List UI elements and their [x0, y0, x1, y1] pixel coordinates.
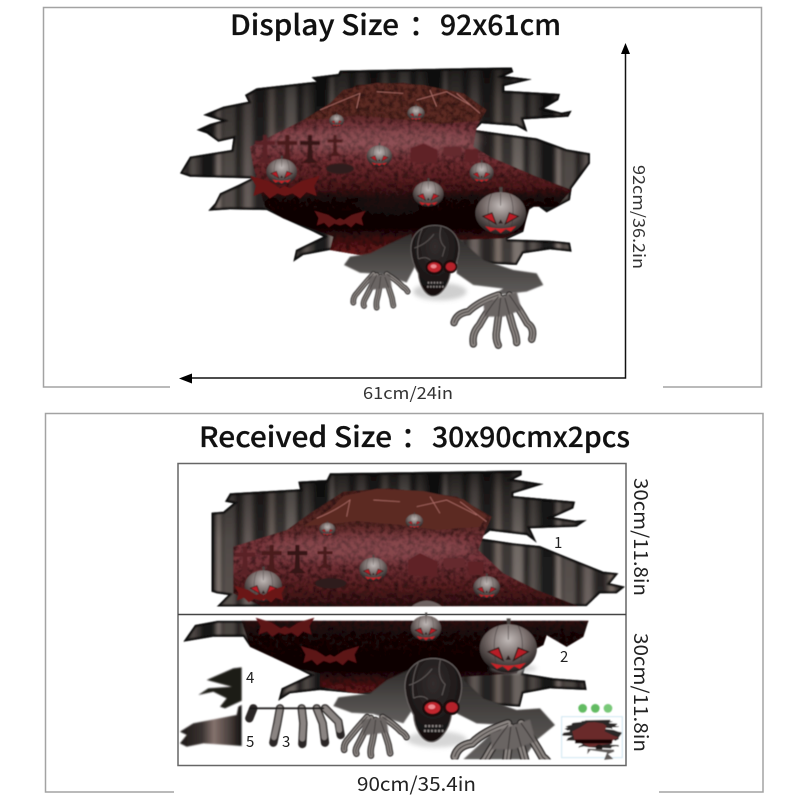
title: received size: ：	[401, 416, 429, 456]
label: sheet 2 height: 30cm/11.8in	[628, 633, 657, 752]
part numbers: 3	[282, 731, 290, 752]
hill with roots	[303, 83, 487, 124]
title: received size	[199, 416, 630, 456]
crawling creature	[344, 225, 543, 345]
graveyard scene	[250, 83, 572, 257]
title: display size: 92x61cm	[440, 4, 561, 44]
title: received size: 30x90cmx2pcs	[432, 416, 630, 456]
part numbers: 2	[560, 646, 568, 667]
illustration: sticker sheets	[179, 470, 626, 760]
sheet 2 scene	[242, 621, 588, 693]
part numbers	[246, 532, 568, 752]
sheet 1 scene	[233, 488, 578, 607]
piece 5	[180, 705, 242, 747]
sheet 1 bat	[234, 586, 286, 602]
bats	[250, 176, 366, 227]
sheet 1 graves	[235, 545, 483, 589]
smoke in dark band	[360, 195, 420, 212]
sheet 1 fog	[263, 536, 477, 561]
sheet 2 bats	[256, 618, 359, 665]
piece 3 hand	[249, 708, 341, 744]
label: height 92cm: 92cm/36.2in	[628, 165, 652, 269]
piece 4	[198, 667, 242, 708]
title: received size: Received Size	[199, 416, 392, 456]
arrow: height and width dimensions	[179, 43, 630, 384]
torn curtain edge	[170, 63, 597, 270]
sheet 2 curtain	[182, 620, 589, 708]
part numbers: 4	[246, 667, 254, 688]
part numbers: 1	[554, 532, 562, 553]
label: sheet 1 height: 30cm/11.8in	[628, 478, 657, 596]
sheet 1 pumpkins	[245, 512, 500, 606]
fog	[270, 127, 483, 152]
label: width 61cm: 61cm/24in	[363, 380, 453, 404]
sheet 2 pumpkins	[411, 612, 537, 673]
frame: received size panel	[46, 414, 763, 792]
frame: display size panel	[44, 8, 762, 387]
gravestones and crosses	[255, 135, 478, 174]
pumpkins	[266, 104, 526, 235]
sheet 2 creature	[332, 657, 556, 760]
sheet outline box	[178, 464, 626, 766]
sheet 1 curtain	[203, 467, 633, 610]
part numbers: 5	[246, 731, 254, 752]
title: display size: ：	[409, 4, 437, 44]
product thumbnail	[562, 704, 622, 760]
title: display size	[230, 4, 561, 44]
title: display size: Display Size	[230, 4, 399, 44]
illustration: assembled wall decal	[170, 63, 597, 345]
label: sheet width: 90cm/35.4in	[357, 768, 476, 797]
sheet 1 hill	[303, 489, 487, 530]
